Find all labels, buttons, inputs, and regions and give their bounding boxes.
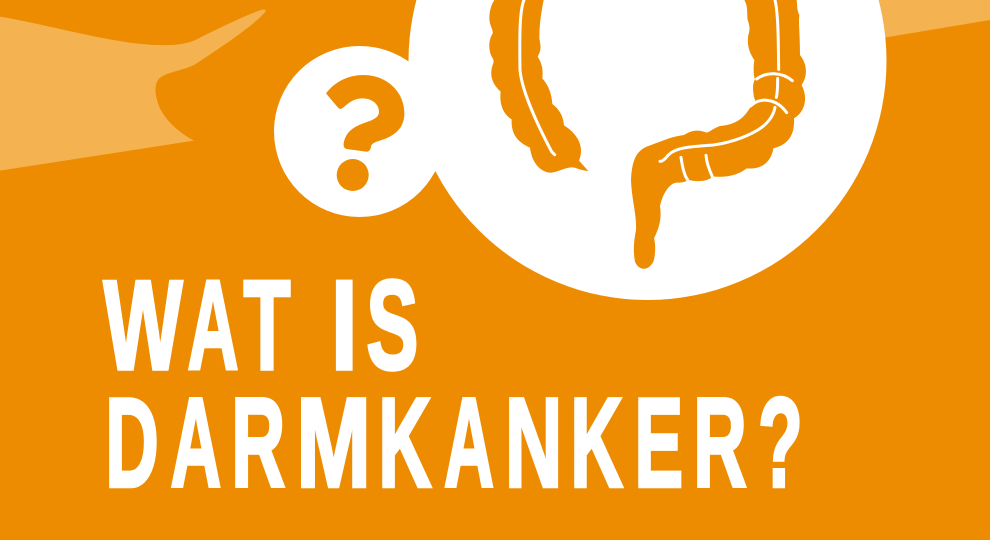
colon: ascending section: [489, 0, 588, 173]
title line 1: S: [366, 254, 418, 396]
colon: descending section and rectum: [631, 0, 806, 269]
title line 2: R: [693, 371, 747, 513]
left speech-bubble tail shape: [0, 9, 266, 171]
title line 2: K: [378, 371, 431, 513]
title line 2: ?: [758, 371, 803, 513]
title: [104, 254, 803, 513]
title line 2: E: [634, 371, 683, 513]
colon: ascending section highlight: [520, 0, 555, 155]
top-right light shape: [870, 0, 990, 40]
icon: colon: [489, 0, 806, 269]
title line 2: K: [570, 371, 623, 513]
title line 2: M: [296, 371, 371, 513]
title line 2: N: [505, 371, 562, 513]
title line 1: I: [331, 254, 358, 396]
title line 1: A: [188, 254, 238, 396]
small white bubble: [274, 46, 445, 217]
title line 2: A: [444, 371, 494, 513]
large white thought bubble: [408, 0, 886, 300]
title line 1: T: [244, 254, 290, 396]
title line 2: A: [170, 371, 221, 513]
icon: question mark: [326, 75, 404, 191]
colon: descending section highlights: [660, 0, 792, 179]
title line 2: D: [105, 371, 159, 513]
title line 1: W: [104, 254, 183, 396]
title line 2: R: [231, 371, 285, 513]
